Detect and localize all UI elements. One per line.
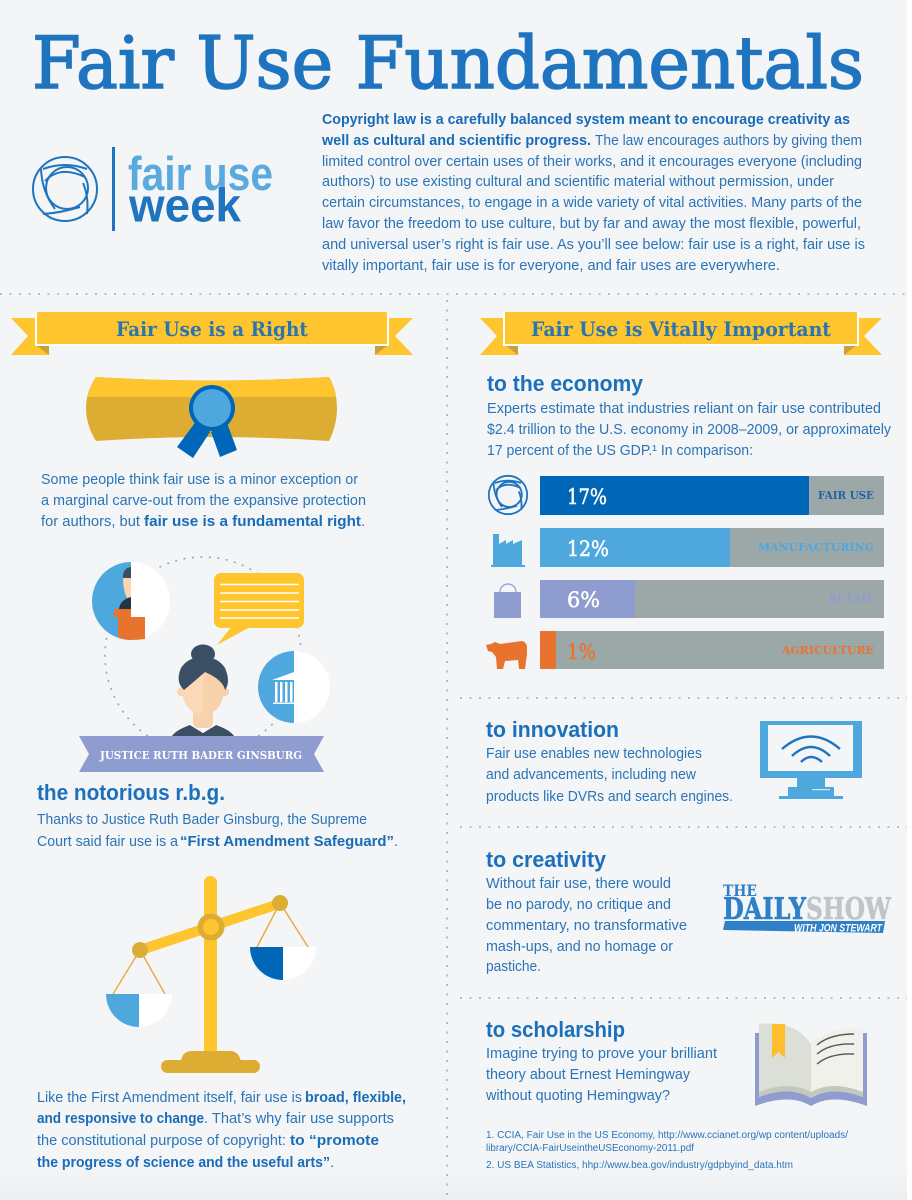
text: minor exception: a marginal carve-out from the expansive protection xyxy=(41,493,366,509)
intro text: The law encourages authors by giving them xyxy=(595,133,862,149)
text: to innovation: and advancements, including new xyxy=(486,767,696,783)
bar: agriculture 1% xyxy=(486,631,884,669)
banner: Fair Use is Vitally Important: Fair Use is Vitally Important xyxy=(531,317,832,341)
icon: speaker at podium xyxy=(92,562,170,640)
text: minor exception xyxy=(41,472,366,530)
intro text: limited control over certain uses of their works, and it encourages everyone (including xyxy=(322,154,862,170)
text: to scholarship: Imagine trying to prove your brilliant xyxy=(486,1046,717,1062)
banner: Fair Use is Vitally Important xyxy=(480,312,882,355)
icon: woman portrait xyxy=(172,644,234,736)
text: minor exception: for authors, but xyxy=(41,514,140,530)
text: First Amendment: the constitutional purpose of copyright: xyxy=(37,1133,286,1149)
text: to creativity: to creativity xyxy=(486,847,607,872)
bar: retail 6% xyxy=(494,580,884,618)
text: to innovation xyxy=(486,717,733,805)
text: First Amendment: . xyxy=(330,1155,334,1171)
text: to creativity: Without fair use, there would xyxy=(486,876,671,892)
text: First Amendment: broad, flexible, xyxy=(305,1090,406,1106)
title: Fair Use Fundamentals xyxy=(32,21,864,105)
banner: Fair Use is a Right: Fair Use is a Right xyxy=(116,317,309,341)
text: First Amendment: Like the First Amendment itself, fair use is xyxy=(37,1090,302,1106)
bar: retail 6%: 6% xyxy=(567,588,600,612)
ribbon: name label: JUSTICE RUTH BADER GINSBURG xyxy=(99,749,302,762)
text: to scholarship: theory about Ernest Hemingway xyxy=(486,1067,691,1083)
intro text: Copyright law is a carefully balanced system meant to encourage creativity as xyxy=(322,112,850,128)
intro text: vitally important, fair use is for everyone, and fair uses are everywhere. xyxy=(322,258,780,274)
text: minor exception: . xyxy=(361,514,365,530)
footnotes: 1. CCIA, Fair Use in the US Economy, http://www.ccianet.org/wp content/uploads/ xyxy=(486,1130,848,1141)
intro text: authors) to use existing cultural and scientific material without permission, under xyxy=(322,174,834,190)
bar: fair use 17% xyxy=(489,476,884,515)
text: the notorious r.b.g.: Thanks to Justice Ruth Bader Ginsburg, the Supreme xyxy=(37,812,367,828)
intro text: and universal user’s right is fair use. As you’ll see below: fair use is a right, fair use is xyxy=(322,237,865,253)
bar: manufacturing 12% xyxy=(491,528,884,567)
icon: courthouse xyxy=(258,651,330,723)
text: the notorious r.b.g.: Court said fair use is a xyxy=(37,834,179,850)
text: to innovation: to innovation xyxy=(486,717,619,742)
text: to creativity: pastiche. xyxy=(486,959,541,975)
intro text: certain circumstances, to engage in a wide variety of vital activities. Many parts of the xyxy=(322,195,862,211)
bar chart xyxy=(486,476,884,669)
text: to creativity: be no parody, no critique and xyxy=(486,897,671,913)
icon: balance scale xyxy=(106,876,316,1073)
intro text: law favor the freedom to use culture, but by far and away the most flexible, powerful, xyxy=(322,216,861,232)
banner: Fair Use is a Right xyxy=(11,312,413,355)
text: to creativity: mash-ups, and no homage or xyxy=(486,939,673,955)
text: to innovation: Fair use enables new technologies xyxy=(486,746,702,762)
bar: manufacturing 12%: 12% xyxy=(567,537,609,561)
icon: aperture xyxy=(33,157,97,221)
logo: The Daily Show: DAILY xyxy=(723,892,806,927)
footnotes xyxy=(486,1130,848,1171)
text: to the economy xyxy=(487,371,892,459)
text: minor exception: Some people think fair use is a minor exception or xyxy=(41,472,358,488)
intro text: well as cultural and scientific progress. xyxy=(321,133,591,149)
text: minor exception: fair use is a fundamental right xyxy=(144,514,361,530)
logo: The Daily Show xyxy=(723,881,892,934)
text: to scholarship xyxy=(485,1017,717,1104)
bar: agriculture 1%: AGRICULTURE xyxy=(781,644,874,657)
text: to the economy: 17 percent of the US GDP.¹ In comparison: xyxy=(487,443,753,459)
text: the notorious r.b.g.: . xyxy=(394,834,398,850)
text: to the economy: $2.4 trillion to the U.S. economy in 2008–2009, or approximately xyxy=(487,422,892,438)
icon: open book xyxy=(755,1023,867,1106)
text: First Amendment xyxy=(37,1090,406,1171)
bar: agriculture 1%: 1% xyxy=(567,640,596,664)
text: to innovation: products like DVRs and search engines. xyxy=(486,789,733,805)
ribbon: name label xyxy=(79,736,324,772)
text: First Amendment: . That’s why fair use supports xyxy=(204,1111,394,1127)
text: to scholarship: to scholarship xyxy=(486,1017,625,1042)
bar: fair use 17%: FAIR USE xyxy=(818,489,874,502)
footnotes: 2. US BEA Statistics, hhp://www.bea.gov/industry/gdpbyind_data.htm xyxy=(486,1160,793,1171)
illustration: Justice Ginsburg xyxy=(79,557,330,772)
text: the notorious r.b.g.: “First Amendment Safeguard” xyxy=(180,834,394,850)
icon: monitor with wifi xyxy=(760,721,862,799)
text: First Amendment: and responsive to change xyxy=(37,1111,204,1127)
bar: fair use 17%: 17% xyxy=(567,485,607,509)
logo: fair use week: fair use xyxy=(128,147,273,200)
footnotes: library/CCIA-FairUseintheUSEconomy-2011.pdf xyxy=(486,1143,694,1154)
icon: speech bubble xyxy=(214,573,304,645)
logo: The Daily Show: THE xyxy=(723,881,757,900)
text: the notorious r.b.g.: the notorious r.b.g. xyxy=(37,780,225,805)
text: to creativity xyxy=(486,847,687,975)
text: the notorious r.b.g. xyxy=(37,780,398,850)
logo: fair use week: week xyxy=(128,178,242,232)
text: to the economy: to the economy xyxy=(487,371,644,396)
text: to scholarship: without quoting Hemingway? xyxy=(485,1088,670,1104)
text: First Amendment: to “promote xyxy=(290,1133,379,1149)
icon: diploma with ribbon xyxy=(86,377,337,458)
text: to the economy: Experts estimate that industries reliant on fair use contributed xyxy=(487,401,881,417)
intro text xyxy=(321,112,865,274)
text: to creativity: commentary, no transformative xyxy=(486,918,687,934)
logo: fair use week xyxy=(33,147,273,232)
bar: retail 6%: RETAIL xyxy=(828,592,874,605)
bar: manufacturing 12%: MANUFACTURING xyxy=(758,541,874,554)
text: First Amendment: the progress of science and the useful arts” xyxy=(37,1155,330,1171)
logo: The Daily Show: WITH JON STEWART xyxy=(794,922,883,934)
